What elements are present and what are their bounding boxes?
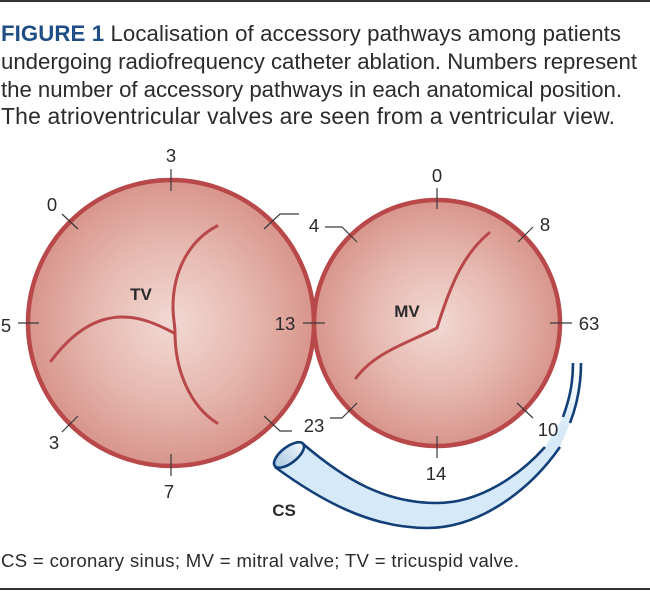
numbers: 10 (538, 419, 558, 440)
leaflet lines MV (356, 233, 489, 378)
numbers: 14 (426, 463, 446, 484)
title caption: FIGURE 1 Localisation of accessory pathways among patients (1, 21, 621, 46)
tube opening (270, 438, 308, 472)
numbers: 3 (166, 145, 176, 166)
title caption: The atrioventricular valves are seen from a ventricular view. (1, 103, 615, 129)
label CS: CS (272, 501, 296, 520)
label MV: MV (394, 302, 420, 321)
tick marks (18, 169, 572, 476)
numbers: 5 (1, 315, 11, 336)
numbers: 23 (304, 415, 324, 436)
numbers: 13 (275, 313, 295, 334)
numbers: 8 (540, 214, 550, 235)
numbers: 3 (49, 432, 59, 453)
numbers: 0 (47, 194, 57, 215)
tricuspid valve (28, 180, 314, 466)
numbers (1, 145, 599, 502)
numbers: 0 (432, 165, 442, 186)
footnote: CS = coronary sinus; MV = mitral valve; TV = tricuspid valve. (1, 550, 519, 571)
title caption (1, 21, 637, 129)
label TV: TV (130, 285, 153, 304)
title caption: undergoing radiofrequency catheter ablation. Numbers represent (1, 49, 637, 74)
coronary sinus tube (270, 363, 581, 528)
title caption: the number of accessory pathways in each anatomical position. (1, 77, 622, 102)
mitral valve (314, 200, 560, 446)
numbers: 63 (579, 313, 599, 334)
leaflet lines TV (51, 226, 217, 423)
numbers: 4 (309, 215, 319, 236)
numbers: 7 (164, 481, 174, 502)
